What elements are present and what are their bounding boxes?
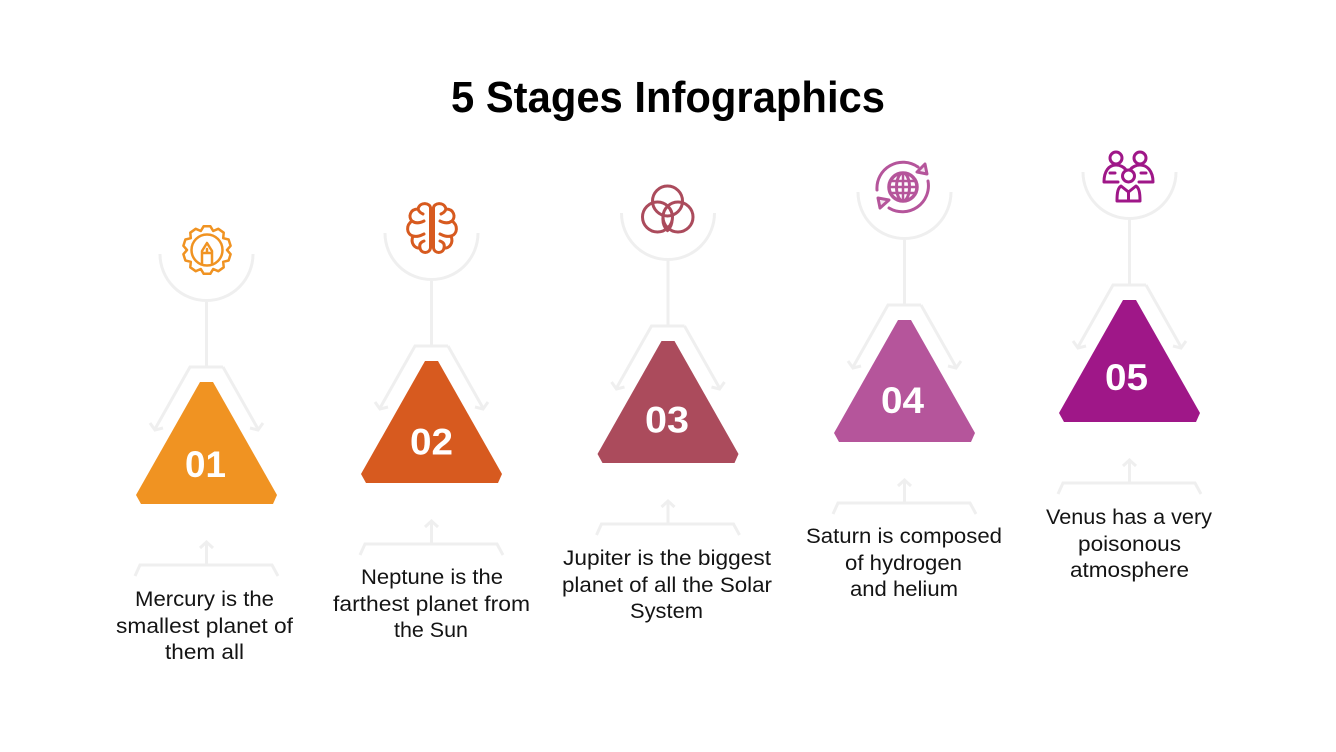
text 01: smallest planet of xyxy=(116,615,293,638)
icon: gear with pencil xyxy=(183,226,231,274)
stage 04 xyxy=(806,162,1002,601)
text 05: atmosphere xyxy=(1070,559,1189,582)
number 03: 03 xyxy=(645,400,689,440)
text 01: Mercury is the xyxy=(135,588,274,611)
stage 01 xyxy=(116,226,293,664)
text 03: Jupiter is the biggest xyxy=(563,547,771,570)
text 02: the Sun xyxy=(394,619,468,642)
text 01 xyxy=(116,588,293,664)
text 02: farthest planet from xyxy=(333,593,530,616)
icon: globe with rotating arrows xyxy=(877,162,928,212)
text 01: them all xyxy=(165,641,244,664)
triangle 04 xyxy=(834,320,975,442)
text 04: Saturn is composed xyxy=(806,525,1002,548)
number 02: 02 xyxy=(410,422,453,462)
text 03: System xyxy=(630,600,703,623)
stage 05 xyxy=(1046,152,1213,582)
connectors 02 xyxy=(360,233,503,555)
triangle 02 xyxy=(361,361,502,483)
connectors 04 xyxy=(833,192,976,514)
text 05: poisonous xyxy=(1078,533,1181,556)
connectors 05 xyxy=(1058,172,1201,494)
text 04: and helium xyxy=(850,578,958,601)
connectors 01 xyxy=(135,254,278,576)
icon: brain xyxy=(408,204,456,252)
number 04: 04 xyxy=(881,380,924,421)
triangle 05 xyxy=(1059,300,1200,422)
stage 03 xyxy=(562,186,772,623)
stage 02 xyxy=(333,204,530,642)
text 04 xyxy=(806,525,1002,601)
text 02: Neptune is the xyxy=(361,566,503,589)
icon: overlapping circles xyxy=(642,186,693,232)
triangle 01 xyxy=(136,382,277,504)
triangle 03 xyxy=(598,341,738,463)
title: 5 Stages Infographics xyxy=(451,73,885,122)
text 05: Venus has a very xyxy=(1046,506,1213,529)
icon: group of people xyxy=(1104,152,1153,201)
connectors 03 xyxy=(596,213,740,535)
text 05 xyxy=(1046,506,1213,582)
text 04: of hydrogen xyxy=(845,552,962,575)
number 05: 05 xyxy=(1105,357,1148,398)
text 02 xyxy=(333,566,530,642)
text 03: planet of all the Solar xyxy=(562,574,772,597)
number 01: 01 xyxy=(185,444,226,485)
text 03 xyxy=(562,547,772,623)
